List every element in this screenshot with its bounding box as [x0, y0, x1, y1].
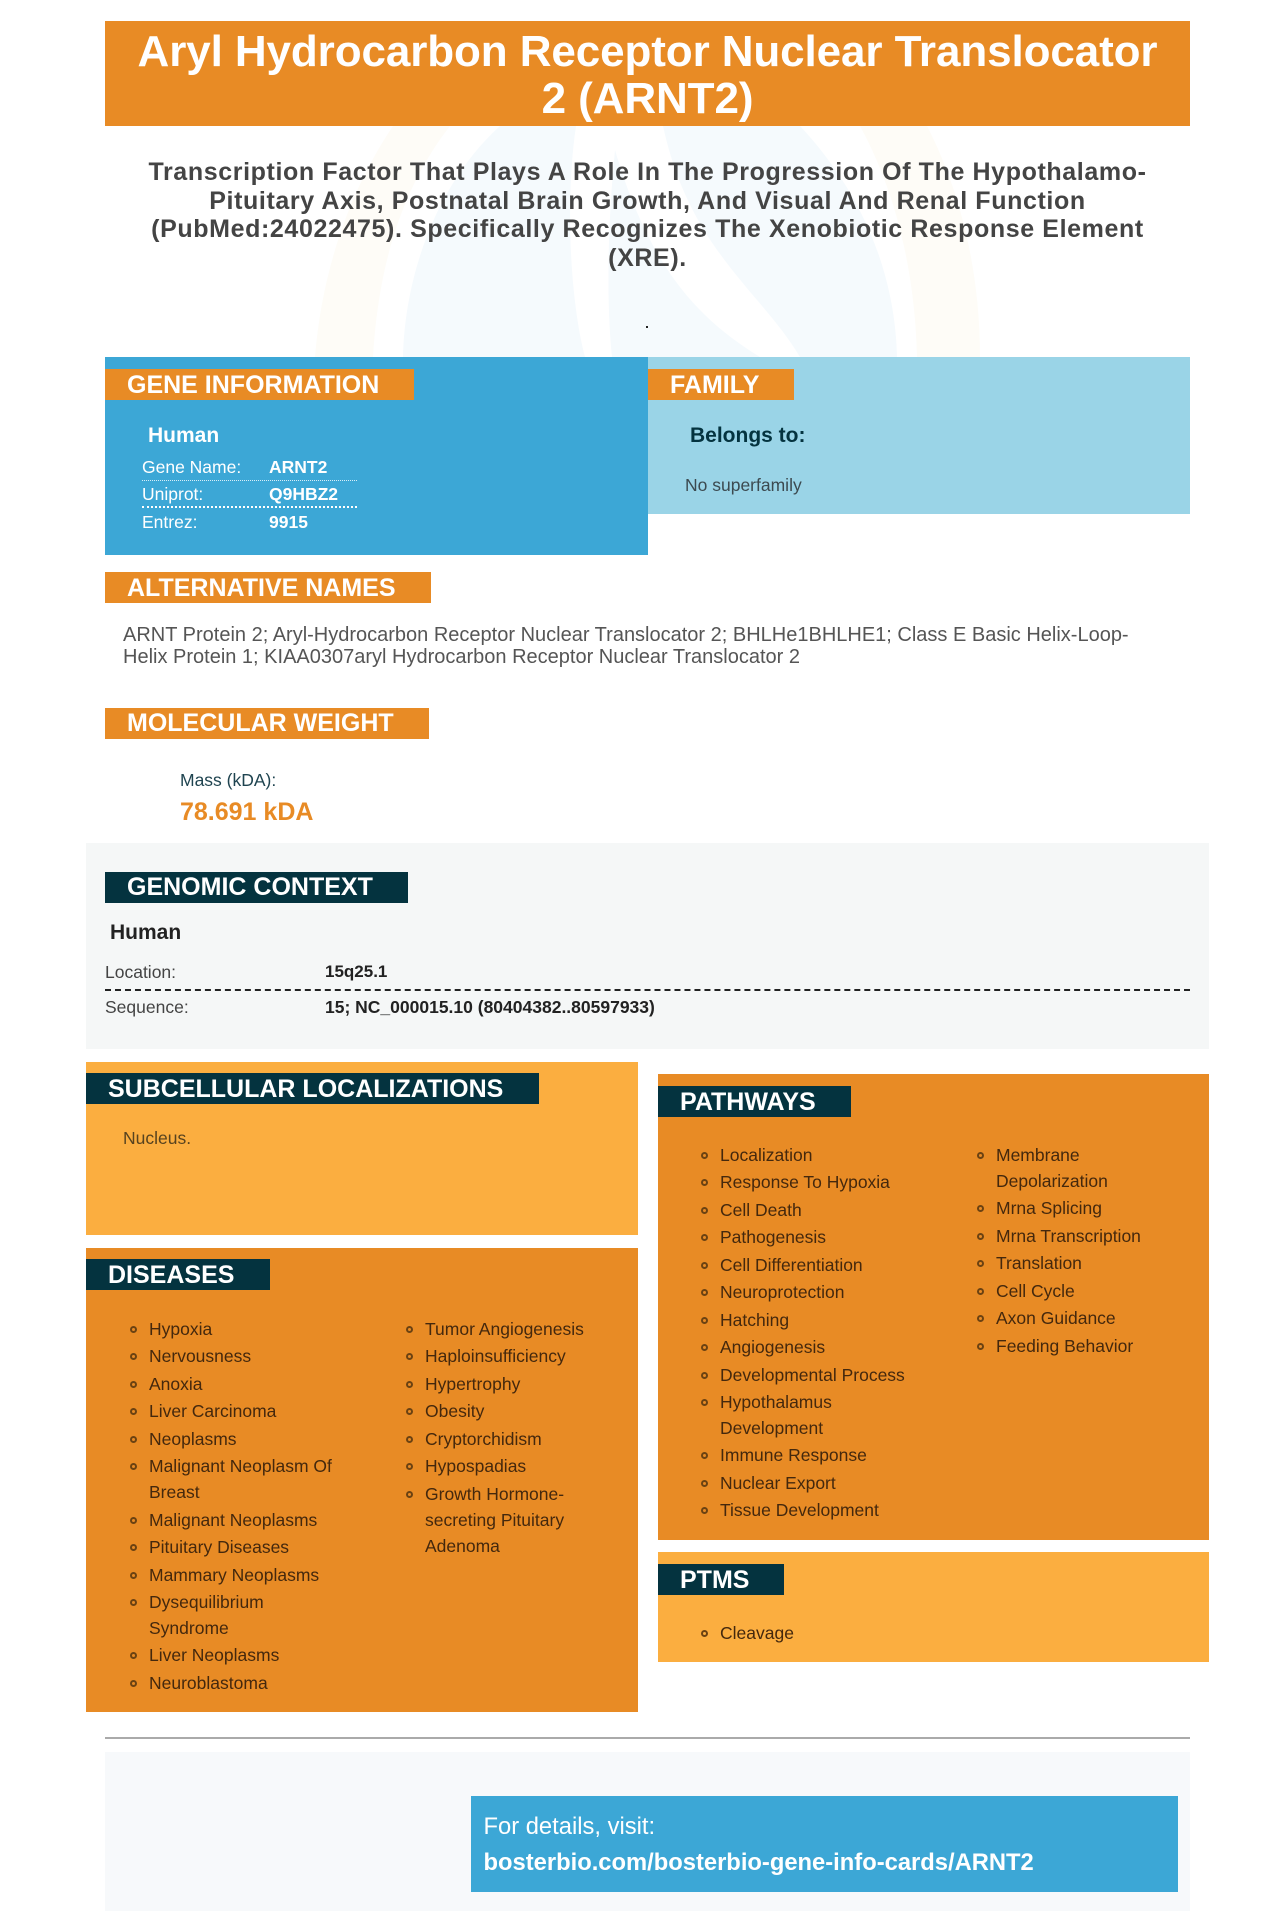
gene info table: ARNT2 [269, 457, 327, 477]
pathways list column 1: Cell Differentiation [720, 1255, 863, 1275]
panel: family [648, 357, 1190, 514]
alternative names text: Helix Protein 1; KIAA0307aryl Hydrocarbon Receptor Nuclear Translocator 2 [123, 646, 800, 668]
diseases list column 1: Pituitary Diseases [149, 1537, 289, 1557]
panel: diseases [86, 1248, 638, 1712]
gene info table: Entrez: [142, 512, 197, 532]
pathways list column 2: Translation [996, 1253, 1082, 1273]
callout: details link [470, 1796, 1178, 1892]
diseases list column 1: Malignant Neoplasms [149, 1510, 317, 1530]
pathways list column 2 [977, 1145, 1141, 1356]
sequence row: Sequence: [105, 997, 189, 1017]
subtitle description: Pituitary Axis, Postnatal Brain Growth, And Visual And Renal Function [209, 187, 1086, 215]
subtitle description: (XRE). [608, 244, 687, 272]
pathways list column 1: Angiogenesis [720, 1337, 825, 1357]
heading: diseases: DISEASES [108, 1261, 234, 1289]
species label: Human [110, 921, 181, 944]
diseases list column 2: Hypertrophy [425, 1374, 520, 1394]
pathways list column 1: Nuclear Export [720, 1473, 836, 1493]
heading: pathways [658, 1086, 851, 1117]
pathways list column 2: Mrna Splicing [996, 1198, 1102, 1218]
mass value: 78.691 kDA [180, 798, 313, 826]
panel: subcellular localizations [86, 1062, 638, 1235]
heading: ptms [658, 1564, 784, 1595]
diseases list column 1: Dysequilibrium Syndrome [149, 1592, 264, 1638]
gene info table: Uniprot: [142, 484, 203, 504]
pathways list column 1: Localization [720, 1145, 812, 1165]
heading: diseases [86, 1259, 270, 1290]
heading: molecular weight: MOLECULAR WEIGHT [127, 709, 394, 737]
visit url: bosterbio.com/bosterbio-gene-info-cards/ARNT2 [484, 1849, 1034, 1876]
pathways list column 2: Feeding Behavior [996, 1336, 1133, 1356]
dashed divider [105, 989, 1190, 991]
diseases list column 2 [406, 1319, 584, 1556]
panel: genomic context [86, 843, 1209, 1049]
panel: footer [105, 1752, 1190, 1911]
subtitle description: Transcription Factor That Plays A Role In The Progression Of The Hypothalamo- [148, 158, 1147, 186]
diseases list column 1: Liver Carcinoma [149, 1401, 276, 1421]
pathways list column 2: Membrane Depolarization [996, 1145, 1108, 1191]
centre dot [646, 326, 648, 328]
heading: pathways: PATHWAYS [680, 1088, 816, 1116]
diseases list column 1: Nervousness [149, 1346, 251, 1366]
diseases list column 1: Mammary Neoplasms [149, 1564, 319, 1584]
diseases list column 1: Hypoxia [149, 1319, 212, 1339]
background watermark [403, 126, 897, 357]
diseases list column 2: Growth Hormone-secreting Pituitary Adenoma [425, 1484, 564, 1556]
gene info table: Gene Name: [142, 457, 241, 477]
title banner [105, 21, 1190, 126]
location value: 15q25.1 [325, 962, 387, 981]
subtitle description [148, 158, 1147, 272]
diseases list column 1: Neuroblastoma [149, 1673, 268, 1693]
pathways list column 1 [701, 1145, 905, 1520]
pathways list column 1: Response To Hypoxia [720, 1172, 890, 1192]
pathways list column 1: Immune Response [720, 1445, 867, 1465]
pathways list column 1: Cell Death [720, 1200, 802, 1220]
sequence value: 15; NC_000015.10 (80404382..80597933) [325, 997, 655, 1017]
diseases list column 2: Obesity [425, 1401, 484, 1421]
heading: family: FAMILY [670, 371, 759, 399]
pathways list column 2: Cell Cycle [996, 1281, 1075, 1301]
gene info table: Q9HBZ2 [269, 484, 338, 504]
pathways list column 1: Neuroprotection [720, 1282, 845, 1302]
heading: ptms: PTMS [680, 1566, 749, 1594]
panel: pathways [658, 1074, 1209, 1540]
diseases list column 1 [130, 1319, 332, 1693]
heading: genomic context: GENOMIC CONTEXT [127, 873, 373, 901]
heading: family [648, 369, 794, 400]
panel: ptms [658, 1552, 1209, 1662]
diseases list column 1: Neoplasms [149, 1429, 237, 1449]
panel: gene information [105, 357, 648, 555]
diseases list column 1: Malignant Neoplasm Of Breast [149, 1456, 332, 1502]
pathways list column 1: Hatching [720, 1310, 789, 1330]
pathways list column 1: Developmental Process [720, 1364, 905, 1384]
pathways list column 1: Tissue Development [720, 1500, 879, 1520]
location row: Location: [105, 962, 176, 982]
visit label: For details, visit: [484, 1813, 655, 1840]
heading: gene information: GENE INFORMATION [127, 371, 379, 399]
localization text: Nucleus. [123, 1128, 191, 1148]
alternative names text: ARNT Protein 2; Aryl-Hydrocarbon Receptor Nuclear Translocator 2; BHLHe1BHLHE1; Class E Basic Helix-Loop- [123, 624, 1129, 646]
gene info table: 9915 [269, 512, 308, 532]
diseases list column 2: Tumor Angiogenesis [425, 1319, 584, 1339]
subtitle description: (PubMed:24022475). Specifically Recognizes The Xenobiotic Response Element [151, 215, 1144, 243]
pathways list column 2: Mrna Transcription [996, 1226, 1141, 1246]
pathways list column 2: Axon Guidance [996, 1308, 1116, 1328]
heading: alternative names: ALTERNATIVE NAMES [127, 574, 396, 602]
family value: No superfamily [685, 475, 802, 495]
title banner: 2 (ARNT2) [542, 74, 753, 123]
mass label: Mass (kDA): [180, 770, 276, 790]
pathways list column 1: Hypothalamus Development [720, 1392, 832, 1438]
diseases list column 1: Liver Neoplasms [149, 1645, 279, 1665]
heading: subcellular localizations: SUBCELLULAR LOCALIZATIONS [108, 1075, 503, 1103]
diseases list column 2: Hypospadias [425, 1456, 526, 1476]
diseases list column 2: Haploinsufficiency [425, 1346, 566, 1366]
alternative names text [123, 624, 1129, 668]
diseases list column 1: Anoxia [149, 1374, 203, 1394]
pathways list column 1: Pathogenesis [720, 1227, 826, 1247]
ptms list: Cleavage [720, 1623, 794, 1643]
belongs to label: Belongs to: [690, 424, 806, 447]
footer rule [105, 1737, 1190, 1739]
gene info table [142, 457, 357, 532]
species label: Human [148, 424, 219, 447]
diseases list column 2: Cryptorchidism [425, 1429, 542, 1449]
title banner: Aryl Hydrocarbon Receptor Nuclear Translocator [138, 27, 1157, 76]
